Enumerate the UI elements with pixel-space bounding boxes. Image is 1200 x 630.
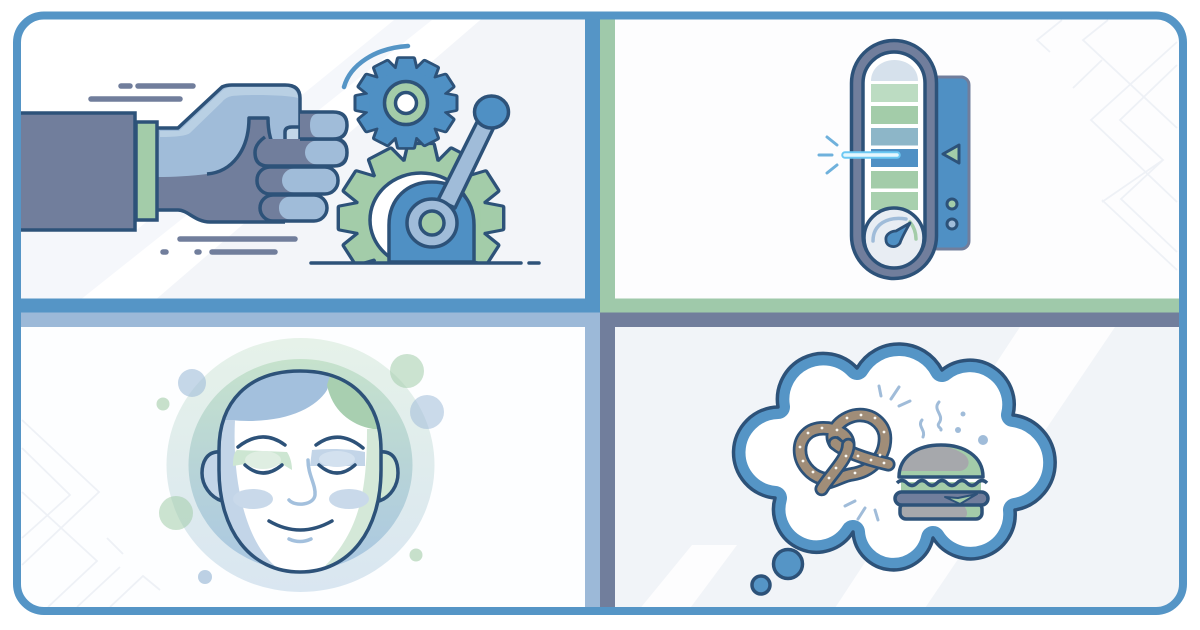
- face shadow right: [325, 429, 380, 566]
- outer halo: [166, 338, 434, 592]
- capsule body: [852, 40, 936, 278]
- pretzel: [799, 414, 888, 489]
- cuff: [136, 122, 157, 220]
- lever arm: [438, 120, 494, 208]
- hand: [157, 85, 300, 222]
- top bun: [899, 445, 983, 477]
- nose: [289, 460, 315, 504]
- lettuce: [897, 480, 987, 486]
- left eyelid tint: [233, 450, 292, 470]
- thought dot small: [752, 576, 770, 594]
- divider: green horizontal: [600, 298, 1183, 312]
- cloud: [734, 344, 1055, 570]
- steam: [920, 402, 988, 445]
- panel: thought bubble: [615, 327, 1183, 611]
- motion lines below fist: [163, 239, 295, 252]
- divider: blue horizontal: [17, 298, 600, 312]
- thought dot large: [774, 550, 802, 578]
- fingers: [255, 112, 347, 221]
- hair blue: [225, 372, 330, 421]
- divider: green vertical: [600, 15, 615, 299]
- arc accent: [344, 46, 408, 87]
- glowing pointer: [841, 151, 901, 159]
- divider: slate horizontal: [600, 312, 1183, 327]
- face: [217, 369, 383, 574]
- indicator light green: [947, 199, 957, 209]
- smile: [269, 521, 332, 530]
- side panel: [930, 77, 969, 249]
- right ear: [379, 452, 398, 501]
- spark rays: [819, 137, 837, 173]
- lever housing: [389, 182, 474, 262]
- triangle marker: [943, 145, 959, 163]
- lever pivot: [407, 199, 457, 247]
- lower lip: [289, 539, 311, 542]
- burger: [895, 445, 988, 519]
- cheese: [945, 494, 977, 504]
- indicator light blue: [947, 219, 957, 229]
- hair green: [327, 376, 378, 429]
- motion lines above fist: [91, 86, 193, 99]
- left ear: [202, 452, 222, 501]
- divider: light blue vertical: [585, 312, 600, 612]
- panel: calm face: [22, 338, 444, 607]
- eyebrows: [238, 437, 363, 448]
- bottom bun: [900, 503, 982, 519]
- closed eyes: [245, 465, 355, 473]
- face outline: [219, 371, 381, 572]
- panel: fist and lever: [10, 15, 585, 298]
- green gear: [336, 142, 506, 262]
- face shadow left: [220, 420, 275, 566]
- divider: light blue horizontal: [17, 312, 600, 327]
- motion ticks: [845, 386, 910, 520]
- divider: blue vertical: [585, 15, 600, 299]
- dial gauge: [864, 208, 924, 268]
- burger filling: [901, 482, 981, 496]
- inner halo: [188, 359, 412, 571]
- right eyelid tint: [310, 449, 365, 467]
- divider: slate vertical: [600, 312, 615, 612]
- panel: gauge meter: [818, 20, 1178, 280]
- level bars: [871, 60, 918, 210]
- patty: [895, 492, 988, 505]
- ground line: [311, 261, 539, 265]
- cheeks: [233, 489, 369, 509]
- lever knob: [474, 96, 508, 128]
- blue gear: [356, 59, 456, 147]
- decorative bubbles: [156, 354, 444, 584]
- sleeve: [10, 113, 135, 230]
